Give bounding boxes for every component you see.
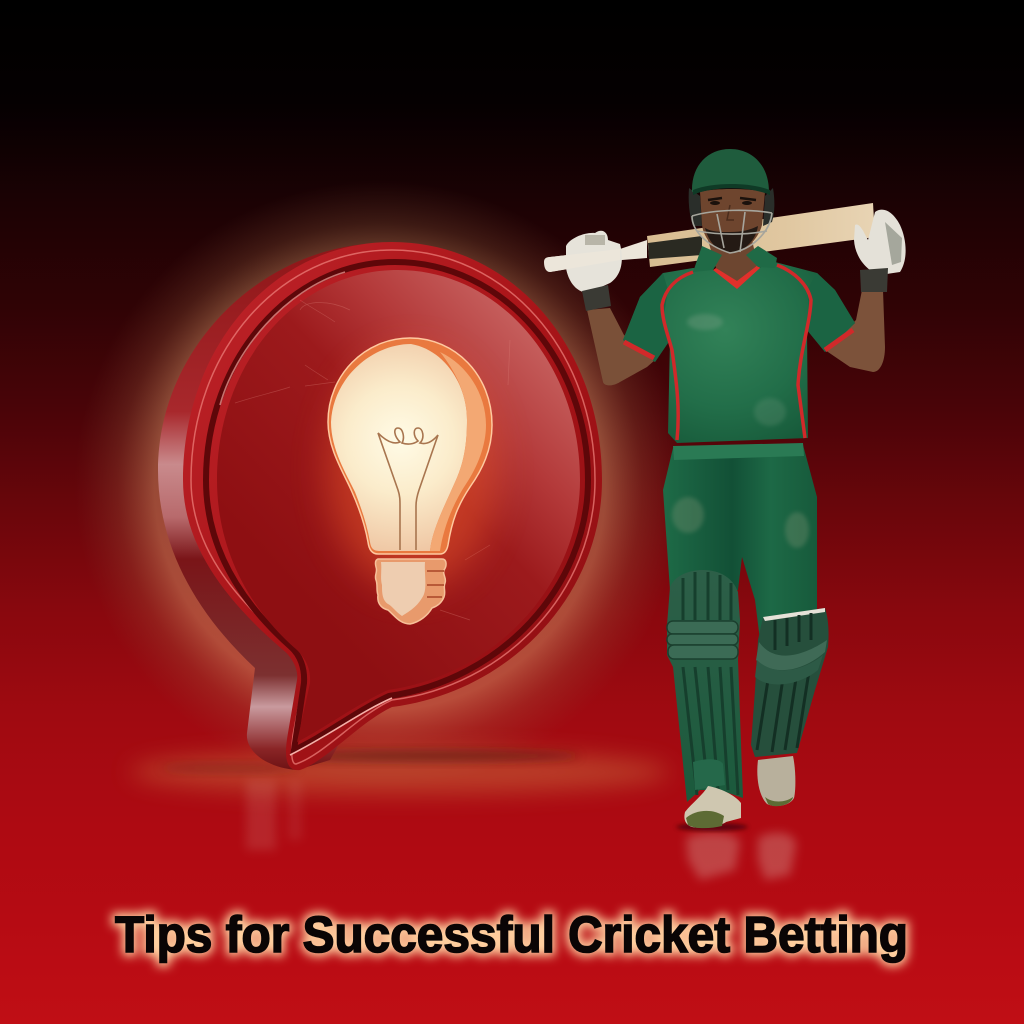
right arm	[825, 290, 885, 372]
bulb glow	[327, 350, 497, 590]
bulb screw base	[375, 559, 446, 624]
collar flaps	[693, 246, 722, 272]
front shoe	[684, 786, 741, 828]
title: Tips for Successful Cricket Betting	[115, 906, 908, 963]
surface scratches	[235, 300, 510, 620]
helmet and face	[689, 149, 774, 253]
back shoe	[757, 756, 795, 806]
floor light band and shadow	[130, 750, 670, 794]
left forearm	[587, 308, 655, 385]
jersey dirt marks	[687, 314, 723, 330]
jersey	[623, 246, 855, 443]
lip highlight strokes	[191, 250, 595, 764]
right glove	[854, 210, 906, 292]
bubble extruded side	[158, 243, 420, 770]
bubble front face	[217, 270, 580, 742]
title: Tips for Successful Cricket Betting	[115, 906, 908, 963]
front leg pad	[667, 570, 743, 802]
neck	[708, 240, 758, 283]
bubble reflection on floor	[246, 780, 302, 850]
cricket player	[544, 149, 906, 831]
bulb glass	[328, 338, 492, 554]
foot shadows	[676, 823, 748, 831]
cricket bat	[544, 203, 875, 272]
bulb filament	[378, 428, 438, 550]
left glove	[550, 231, 622, 311]
speech bubble with lightbulb	[158, 242, 602, 770]
glow behind speech bubble	[75, 180, 685, 790]
player reflection on floor	[686, 832, 796, 880]
red trim	[624, 265, 853, 440]
back leg pad	[751, 608, 829, 757]
trousers	[663, 443, 817, 640]
bubble outer lip	[183, 242, 602, 770]
